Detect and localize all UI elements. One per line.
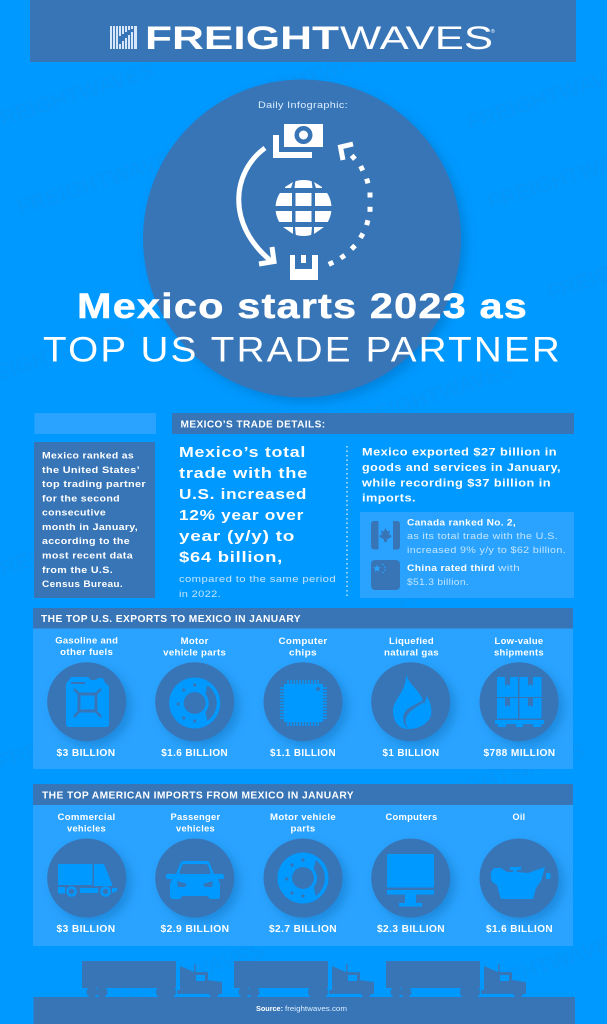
text: summary: from the U.S. [42, 565, 113, 576]
text: China: with [497, 563, 520, 574]
text: summary: Census Bureau. [42, 579, 123, 590]
item: computer chips [264, 636, 342, 759]
source [256, 1004, 347, 1013]
item: passenger vehicles: vehicles [176, 824, 215, 834]
item: low-value shipments: shipments [494, 648, 544, 658]
panel heading: trade details: MEXICO’S TRADE DETAILS: [180, 420, 326, 431]
icon: chip [280, 680, 327, 726]
source: Source: [256, 1004, 283, 1013]
icon: flame [393, 674, 431, 729]
panel: Canada and China [360, 512, 574, 598]
watermark pattern: FREIGHTWAVES [344, 357, 517, 435]
hero circle [143, 80, 461, 398]
icon: money [273, 124, 323, 158]
item: low-value shipments [480, 636, 558, 759]
icon: Canada flag [371, 521, 400, 550]
item: computer chips: Computer [278, 636, 328, 647]
heading: exports [33, 608, 573, 628]
text: Canada: increased 9% y/y to $62 billion. [407, 545, 566, 556]
watermark pattern: FREIGHTWAVES [14, 142, 187, 220]
text: Canada: as its total trade with the U.S. [407, 531, 558, 542]
item: computers: Computers [386, 812, 438, 823]
text: comparison note [179, 574, 336, 600]
item: motor vehicle parts: Motor [181, 636, 209, 647]
item: low-value shipments: Low-value [494, 636, 544, 647]
panel: top U.S. exports [33, 608, 573, 769]
logo wordmark: ® [491, 28, 495, 35]
item: commercial vehicles: $3 BILLION [56, 924, 116, 935]
heading: exports: THE TOP U.S. EXPORTS TO MEXICO IN JANUARY [41, 614, 301, 625]
panel: left summary [34, 413, 156, 598]
kicker: Daily Infographic: Daily Infographic: [258, 100, 348, 111]
text: exports and imports summary: Mexico exported $27 billion in [362, 447, 557, 459]
icon: China flag [371, 560, 400, 590]
item: motor vehicle parts: parts [290, 824, 316, 834]
arrow: solid curved [239, 148, 274, 264]
text: exports and imports summary: goods and services in January, [362, 462, 561, 474]
text: total trade headline: U.S. increased [179, 486, 307, 503]
text: China: $51.3 billion. [407, 577, 469, 588]
item: computers: $2.3 BILLION [377, 924, 445, 935]
text: summary: top trading partner [42, 479, 146, 490]
hero icon: trade cycle [239, 124, 372, 280]
item: low-value shipments: $788 MILLION [484, 748, 556, 759]
text: exports and imports summary [361, 447, 561, 505]
header: FreightWaves logo band [30, 0, 576, 62]
item: gasoline: other fuels [60, 647, 113, 658]
text: Canada: Canada ranked No. 2, [407, 518, 516, 529]
item: liquefied natural gas: Liquefied [389, 636, 434, 647]
item: motor vehicle parts: $1.6 BILLION [161, 748, 228, 759]
text: China: China rated third [407, 563, 495, 574]
text: summary: month in January, [42, 522, 138, 533]
icon: brake rotor [169, 678, 220, 728]
text: total trade headline: year (y/y) to [179, 528, 295, 545]
icon: truck [58, 864, 117, 896]
icon: jerrycan [66, 677, 109, 727]
text: Canada [407, 518, 566, 556]
footer trucks [82, 961, 526, 998]
source: freightwaves.com [285, 1004, 347, 1013]
title: Mexico starts 2023 as [77, 287, 528, 326]
text: total trade headline [179, 444, 308, 566]
text: total trade headline: Mexico’s total [179, 444, 306, 461]
item: commercial vehicles: Commercial [58, 812, 116, 823]
text: comparison note: compared to the same period [179, 574, 336, 585]
watermark pattern: FREIGHTWAVES [394, 537, 567, 615]
logo wordmark: FREIGHT [145, 20, 340, 56]
item: oil: $1.6 BILLION [486, 924, 553, 935]
text: exports and imports summary: while recording $37 billion in [361, 477, 551, 489]
item: oil: Oil [512, 812, 526, 823]
item: oil [480, 812, 558, 935]
footer band [34, 997, 575, 1024]
text: comparison note: in 2022. [179, 589, 221, 600]
item: motor vehicle parts: vehicle parts [163, 648, 226, 658]
logo wordmark: WAVES [340, 20, 493, 56]
item: liquefied natural gas: $1 BILLION [382, 748, 440, 759]
item: gasoline [47, 636, 126, 759]
item: gasoline: Gasoline and [55, 636, 118, 646]
logo wordmark [145, 20, 495, 56]
item: computers [371, 812, 450, 935]
text: summary: Mexico ranked as [42, 450, 134, 462]
panel: top American imports [33, 784, 573, 946]
text: summary: most recent data [42, 550, 133, 562]
item: passenger vehicles: $2.9 BILLION [160, 924, 230, 935]
text: exports and imports summary: imports. [362, 493, 416, 505]
text: summary [42, 450, 146, 590]
text: summary: for the second [42, 493, 120, 504]
icon: package [290, 255, 318, 280]
icon: monitor [387, 854, 434, 906]
item: motor vehicle parts [264, 812, 342, 935]
item: passenger vehicles [155, 812, 234, 935]
item: motor vehicle parts: Motor vehicle [270, 812, 336, 823]
icon: car [166, 861, 224, 899]
heading: imports: THE TOP AMERICAN IMPORTS FROM MEXICO IN JANUARY [42, 790, 354, 802]
text: summary: consecutive [42, 508, 106, 519]
watermark pattern: FREIGHTWAVES [224, 37, 397, 115]
text: total trade headline: 12% year over [179, 507, 304, 524]
title: TOP US TRADE PARTNER [43, 330, 562, 370]
item: gasoline: $3 BILLION [56, 748, 116, 759]
text: summary: the United States’ [42, 465, 140, 476]
icon: globe [274, 180, 333, 237]
column divider [346, 446, 348, 598]
icon: FreightWaves barcode mark [110, 26, 137, 49]
item: liquefied natural gas [371, 636, 450, 759]
watermark pattern: FREIGHTWAVES [94, 937, 267, 1015]
item: commercial vehicles: vehicles [67, 824, 106, 834]
item: computer chips: chips [289, 648, 317, 658]
icon: oil can [491, 867, 550, 899]
text: summary: according to the [42, 536, 130, 547]
item: computer chips: $1.1 BILLION [270, 748, 336, 759]
item: passenger vehicles: Passenger [170, 812, 220, 823]
icon: pallet of boxes [495, 677, 544, 727]
text: China [407, 563, 520, 588]
text: total trade headline: trade with the [179, 465, 308, 482]
item: motor vehicle parts [155, 636, 234, 759]
watermark pattern: FREIGHTWAVES [414, 737, 587, 815]
item: motor vehicle parts: $2.7 BILLION [269, 924, 337, 935]
item: liquefied natural gas: natural gas [384, 648, 439, 658]
text: total trade headline: $64 billion, [179, 549, 283, 566]
title [43, 287, 562, 370]
heading: imports [33, 784, 573, 805]
panel heading: trade details [172, 413, 574, 434]
icon: brake rotor [278, 852, 328, 904]
item: commercial vehicles [47, 812, 126, 935]
arrow: dotted curved [328, 144, 372, 267]
